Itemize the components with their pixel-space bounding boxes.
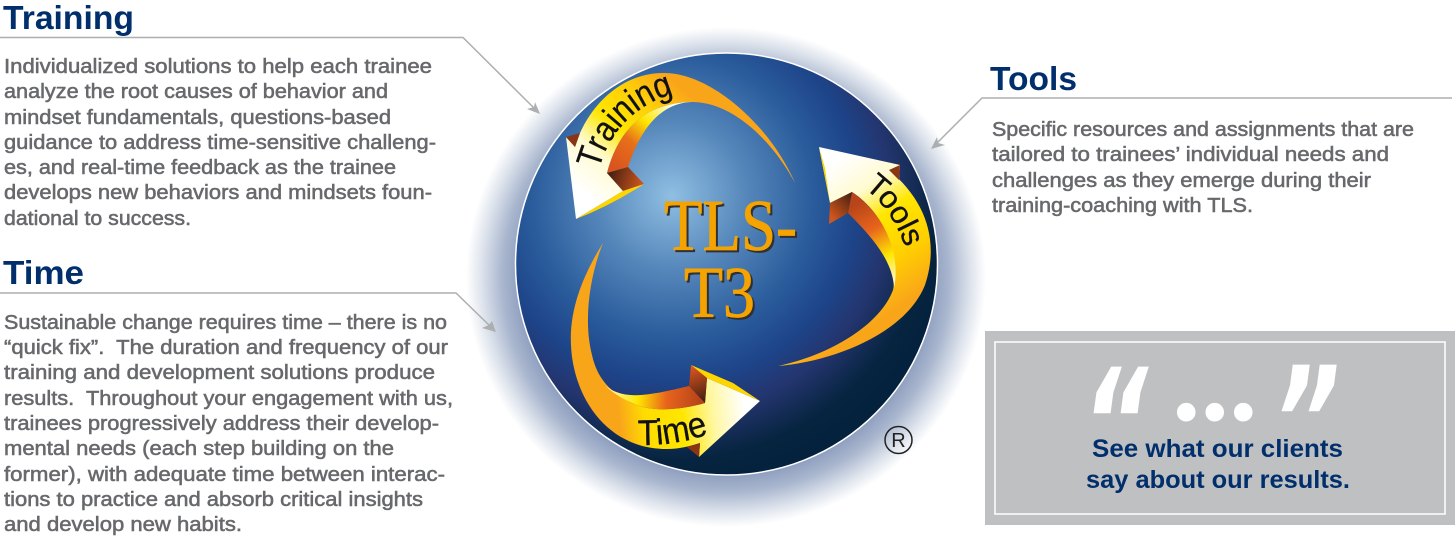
text block: tools body: Specific resources and assignments that are bbox=[992, 119, 1414, 141]
heading: Tools: Tools bbox=[990, 60, 1077, 97]
logo wordmark: T3 bbox=[686, 254, 757, 335]
arrow: Training bbox=[566, 73, 795, 219]
logo wordmark bbox=[664, 185, 799, 335]
text block: time body: tions to practice and absorb critical insights bbox=[4, 489, 423, 511]
quotation marks and ellipsis: “ bbox=[1082, 338, 1149, 512]
callout background bbox=[985, 331, 1455, 525]
callout text: say about our results. bbox=[1086, 466, 1350, 494]
text block: training body: Individualized solutions to help each trainee bbox=[4, 56, 432, 78]
heading: Time: Time bbox=[3, 254, 84, 291]
text block: tools body: tailored to trainees’ individual needs and bbox=[992, 144, 1389, 166]
icon: registered mark bbox=[885, 426, 912, 454]
panel: tools description bbox=[931, 60, 1452, 217]
panel: training description bbox=[0, 0, 540, 230]
text block: time body: mental needs (each step building on the bbox=[4, 438, 394, 460]
quotation marks and ellipsis: ... bbox=[1172, 318, 1258, 445]
text block: training body: es, and real-time feedback as the trainee bbox=[4, 157, 396, 179]
callout frame bbox=[995, 342, 1445, 514]
arrow: Time: Time bbox=[638, 418, 706, 446]
callout: client results bbox=[985, 318, 1455, 525]
text block: time body: Sustainable change requires time – there is no bbox=[4, 312, 447, 334]
text block: tools body bbox=[992, 119, 1414, 217]
arrow: time leader bbox=[0, 293, 496, 332]
globe bbox=[516, 53, 938, 475]
text block: tools body: training-coaching with TLS. bbox=[992, 195, 1253, 217]
arrow: Tools: Tools bbox=[870, 172, 919, 246]
text block: time body: and develop new habits. bbox=[4, 514, 242, 536]
text block: time body bbox=[4, 312, 453, 536]
text block: time body: training and development solutions produce bbox=[4, 362, 435, 384]
callout text bbox=[1086, 435, 1350, 494]
quotation marks and ellipsis: ” bbox=[1274, 336, 1340, 510]
arrow: Training: Training bbox=[576, 76, 672, 162]
text block: training body: mindset fundamentals, questions-based bbox=[4, 107, 391, 129]
icon: registered mark: R bbox=[891, 430, 906, 452]
text block: training body: dational to success. bbox=[4, 208, 191, 230]
text block: tools body: challenges as they emerge during their bbox=[992, 170, 1371, 192]
callout text: See what our clients bbox=[1092, 435, 1343, 463]
heading: Training: Training bbox=[3, 0, 134, 36]
text block: time body: results. Throughout your engagement with us, bbox=[4, 388, 453, 410]
logo glow bbox=[466, 27, 986, 527]
text block: training body: guidance to address time-sensitive challeng- bbox=[4, 132, 436, 154]
text block: time body: “quick fix”. The duration and frequency of our bbox=[4, 337, 448, 359]
text block: time body: former), with adequate time between interac- bbox=[4, 464, 445, 486]
logo wordmark: TLS- bbox=[664, 185, 797, 266]
arrow: Time bbox=[570, 243, 760, 457]
text block: training body: analyze the root causes of behavior and bbox=[4, 81, 388, 103]
logo: TLS-T3 globe bbox=[514, 52, 938, 476]
panel: time description bbox=[0, 254, 496, 536]
quotation marks and ellipsis bbox=[1082, 318, 1340, 512]
text block: training body bbox=[4, 56, 436, 230]
arrow: Tools bbox=[778, 147, 931, 366]
logo wordmark: TLS- bbox=[666, 187, 799, 268]
text block: time body: trainees progressively address their develop- bbox=[4, 413, 439, 435]
text block: training body: develops new behaviors and mindsets foun- bbox=[4, 182, 432, 204]
arrow: training leader bbox=[0, 38, 540, 114]
logo wordmark: T3 bbox=[684, 252, 755, 333]
arrow: tools leader bbox=[931, 98, 1452, 149]
